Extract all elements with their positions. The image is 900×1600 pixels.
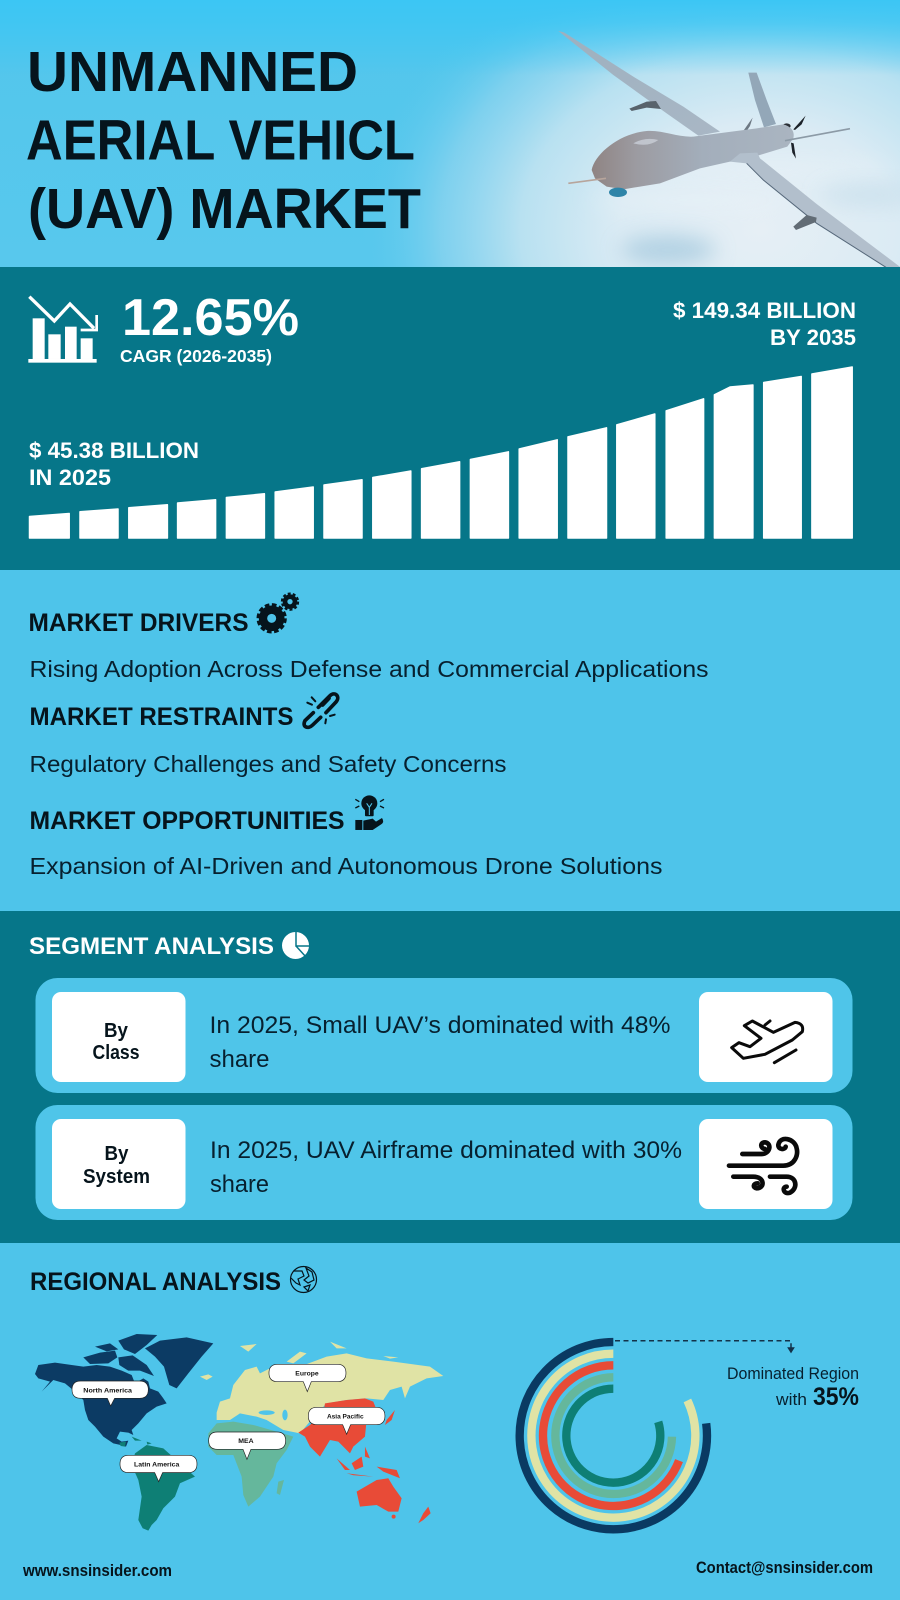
panel: regional analysis xyxy=(30,1266,859,1531)
callout: dominated region xyxy=(727,1364,859,1411)
heading: market drivers: MARKET DRIVERS xyxy=(28,609,248,637)
footer website: www.snsinsider.com xyxy=(22,1562,172,1580)
label box: by class: By xyxy=(104,1019,129,1042)
title xyxy=(26,40,421,241)
label box: by system xyxy=(52,1119,186,1209)
text: driver: Rising Adoption Across Defense and Commercial Applications xyxy=(30,656,708,682)
callout: europe: Europe xyxy=(295,1371,319,1378)
panel: header banner xyxy=(0,0,900,267)
text: class share: share xyxy=(210,1046,270,1073)
text: system share: In 2025, UAV Airframe dominated with 30% xyxy=(210,1137,682,1164)
panel: market growth band xyxy=(0,267,900,570)
callout: dominated region: with xyxy=(775,1390,807,1409)
text: opportunity: Expansion of AI-Driven and Autonomous Drone Solutions xyxy=(30,853,662,879)
callout: north america: North America xyxy=(83,1387,132,1394)
text: class share xyxy=(210,1012,670,1073)
callout: dominated region: Dominated Region xyxy=(727,1364,859,1383)
callout: europe xyxy=(269,1364,346,1392)
arrow: dashed leader xyxy=(615,1341,794,1352)
radial bar chart xyxy=(520,1342,707,1529)
label box: by system: By xyxy=(104,1142,129,1165)
tail fin xyxy=(748,73,776,127)
label box: by system: System xyxy=(83,1165,150,1188)
icon: globe xyxy=(290,1266,316,1292)
callout: latin america: Latin America xyxy=(134,1461,180,1468)
label box: by class xyxy=(52,992,186,1082)
footer contact: Contact@snsinsider.com xyxy=(696,1559,873,1577)
region: latin america xyxy=(119,1437,195,1531)
region: asia pacific xyxy=(298,1398,431,1523)
propeller xyxy=(791,116,806,159)
CAGR value: 12.65% xyxy=(122,289,299,347)
sensor ball xyxy=(609,188,627,197)
icon box: wind xyxy=(699,1119,832,1209)
value 2025 xyxy=(29,438,199,490)
bar chart xyxy=(30,367,852,538)
title: UNMANNED xyxy=(27,40,358,104)
text: system share: share xyxy=(210,1171,269,1198)
icon: pie chart xyxy=(282,931,310,959)
world map xyxy=(35,1334,443,1531)
icon box: plane xyxy=(699,992,832,1082)
callout: latin america xyxy=(120,1455,197,1482)
heading: segment analysis: SEGMENT ANALYSIS xyxy=(29,933,274,960)
icon: gears xyxy=(258,593,298,632)
panel: market drivers, restraints, opportunities xyxy=(28,593,708,879)
card: by system xyxy=(36,1105,852,1220)
callout: mea: MEA xyxy=(238,1438,254,1445)
callout: north america xyxy=(72,1381,148,1406)
drone photo xyxy=(558,31,900,267)
text: system share xyxy=(210,1137,682,1198)
value 2035: BY 2035 xyxy=(770,325,856,350)
icon: broken link xyxy=(304,694,338,727)
card: by class xyxy=(36,978,852,1093)
region: north america xyxy=(35,1334,213,1447)
callout: dominated region: 35% xyxy=(813,1383,859,1411)
region: europe xyxy=(200,1342,443,1433)
CAGR label: CAGR (2026-2035) xyxy=(120,346,272,366)
icon: growth chart xyxy=(28,297,97,363)
heading: market opportunities: MARKET OPPORTUNITIES xyxy=(30,807,344,835)
heading: market restraints: MARKET RESTRAINTS xyxy=(30,703,294,731)
panel: segment analysis band xyxy=(0,911,900,1243)
title: AERIAL VEHICL xyxy=(26,108,415,172)
callout: mea xyxy=(209,1432,286,1459)
text: restraint: Regulatory Challenges and Safety Concerns xyxy=(30,751,507,777)
region: middle east and africa xyxy=(208,1422,293,1507)
far wing xyxy=(558,31,720,136)
near wing xyxy=(730,153,900,267)
icon: idea in hand xyxy=(355,795,384,830)
value 2025: $ 45.38 BILLION xyxy=(29,438,199,463)
value 2025: IN 2025 xyxy=(29,465,111,490)
value 2035: $ 149.34 BILLION xyxy=(673,298,856,323)
title: (UAV) MARKET xyxy=(28,177,421,241)
text: class share: In 2025, Small UAV’s dominated with 48% xyxy=(210,1012,670,1039)
label box: by class: Class xyxy=(92,1041,140,1064)
callout: asia pacific: Asia Pacific xyxy=(327,1414,364,1421)
callout: asia pacific xyxy=(308,1407,385,1434)
sky and clouds background xyxy=(0,0,900,267)
fuselage xyxy=(592,124,794,189)
value 2035 xyxy=(673,298,856,350)
heading: regional analysis: REGIONAL ANALYSIS xyxy=(30,1268,281,1296)
